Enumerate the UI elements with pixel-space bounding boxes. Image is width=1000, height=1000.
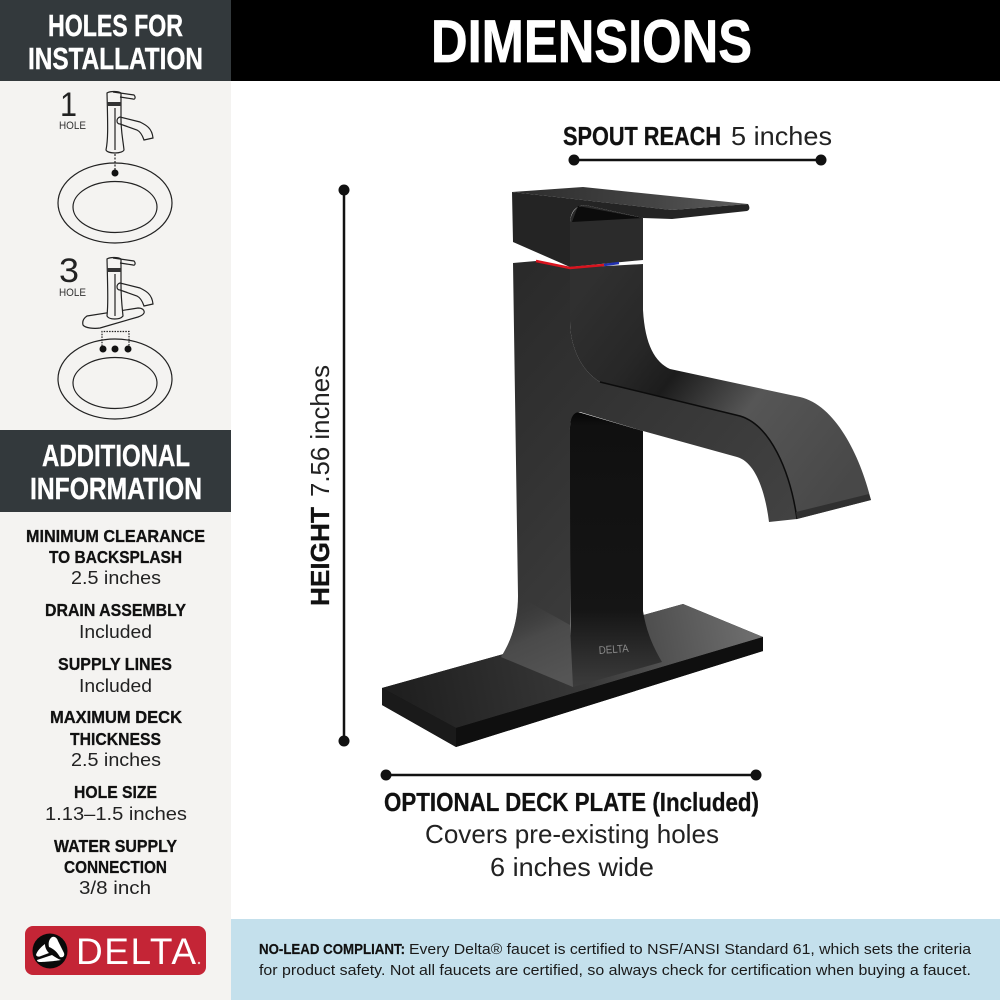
text: additional information list: TO BACKSPLASH [49, 547, 182, 567]
heading: additional information: ADDITIONAL [42, 438, 190, 473]
icon: one hole installation: 1 [60, 86, 77, 124]
dimension: spout reach: 5 inches [731, 121, 832, 151]
text: additional information list: CONNECTION [64, 857, 167, 877]
logo: delta [25, 926, 206, 975]
icon: three hole installation: 3 [59, 252, 79, 290]
icon: three hole installation: HOLE [59, 287, 86, 299]
text: additional information list: 1.13–1.5 inches [45, 804, 187, 824]
body front face [501, 261, 797, 687]
text: additional information list: Included [79, 676, 152, 696]
dimension: spout reach: SPOUT REACH [563, 121, 721, 151]
deck plate [382, 604, 763, 747]
text: additional information list: 2.5 inches [71, 750, 161, 770]
heading: holes for installation [0, 0, 231, 81]
spout edge line [600, 382, 797, 519]
callout: no-lead compliant [231, 919, 1000, 1000]
text: additional information list: MINIMUM CLEARANCE [26, 526, 205, 546]
heading: additional information: INFORMATION [30, 471, 202, 506]
text: additional information list: HOLE SIZE [74, 782, 157, 802]
logo: delta: DELTA [76, 931, 196, 972]
heading: additional information [0, 430, 231, 512]
text: additional information list: THICKNESS [70, 729, 161, 749]
heading: holes for installation: HOLES FOR [48, 8, 183, 43]
handle lever [512, 187, 749, 267]
callout: no-lead compliant: for product safety. Not all faucets are certified, so always check for certification when buying a faucet. [259, 962, 971, 979]
spout upper surface [570, 264, 871, 519]
callout: no-lead compliant: Every Delta® faucet is certified to NSF/ANSI Standard 61, which sets the criteria [409, 941, 972, 958]
dimension: optional deck plate: OPTIONAL DECK PLATE (Included) [384, 787, 759, 817]
base flare highlight [501, 596, 573, 687]
heading: holes for installation: INSTALLATION [28, 41, 203, 76]
text: additional information list: 2.5 inches [71, 568, 161, 588]
icon: three hole installation [58, 252, 172, 419]
brand mark on faucet: DELTA [598, 643, 630, 657]
title: dimensions [231, 0, 1000, 81]
dimension: height: HEIGHT [305, 507, 335, 606]
callout: no-lead compliant: NO-LEAD COMPLIANT: [259, 941, 405, 958]
spout outlet [796, 494, 871, 519]
background: left sidebar [0, 0, 231, 1000]
text: additional information list: Included [79, 622, 152, 642]
faucet illustration [382, 187, 871, 747]
text: additional information list: SUPPLY LINES [58, 654, 172, 674]
text: additional information list: DRAIN ASSEMBLY [45, 600, 186, 620]
text: additional information list: WATER SUPPLY [54, 836, 177, 856]
dimension: height: 7.56 inches [305, 365, 335, 497]
temperature indicator band [536, 261, 619, 268]
text: additional information list [26, 526, 205, 898]
column shadowed face [570, 412, 662, 687]
dimension: optional deck plate [380, 770, 762, 882]
dimension: optional deck plate: Covers pre-existing holes [425, 819, 719, 849]
dimension: spout reach [563, 121, 832, 166]
dimension: height [305, 184, 350, 746]
icon: one hole installation [58, 86, 172, 243]
dimension: optional deck plate: 6 inches wide [490, 852, 654, 882]
icon: one hole installation: HOLE [59, 120, 86, 132]
text: additional information list: MAXIMUM DECK [50, 707, 182, 727]
text: additional information list: 3/8 inch [79, 878, 151, 898]
title: dimensions: DIMENSIONS [431, 8, 752, 75]
